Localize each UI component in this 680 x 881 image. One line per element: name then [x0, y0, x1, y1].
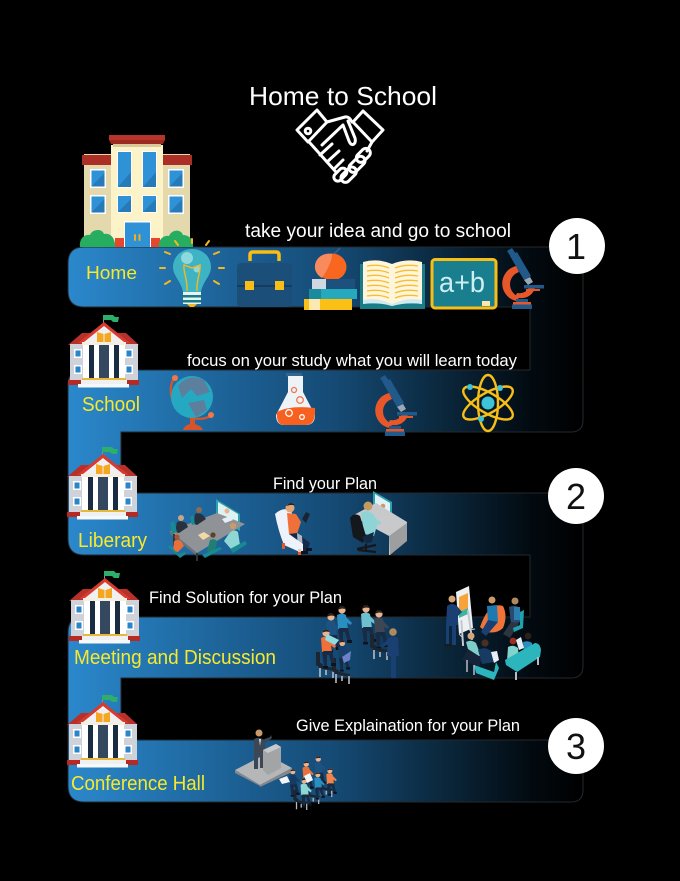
scene: presentation group: [445, 586, 541, 680]
scene: meeting table: [168, 499, 247, 561]
icon: flask: [276, 373, 315, 425]
building: Conference Hall: [67, 695, 138, 768]
icon: atom: [459, 375, 517, 431]
icon: open book: [360, 260, 425, 309]
step number 2: [548, 468, 604, 524]
label: Home: Home: [86, 262, 137, 283]
text: Find Solution caption: Find Solution for your Plan: [149, 589, 342, 607]
label: Meeting and Discussion: Meeting and Discussion: [74, 647, 276, 669]
scene: podium speaker: [235, 730, 292, 787]
building: School: [68, 315, 139, 388]
text: Give Explaination caption: Give Explaination for your Plan: [296, 717, 520, 735]
icon: globe: [171, 375, 214, 430]
step number 3: 3: [566, 726, 586, 767]
building: Liberary: [67, 447, 138, 520]
icon: briefcase: [237, 252, 292, 307]
scene: man at desk: [350, 491, 407, 555]
label: School: School: [82, 394, 140, 416]
step number 2: 2: [566, 476, 586, 517]
icon: home building: [80, 135, 193, 247]
label: Conference Hall: Conference Hall: [71, 773, 205, 795]
label: Liberary: Liberary: [78, 530, 147, 552]
icon: light bulb: [160, 239, 224, 307]
step number 1: 1: [566, 226, 586, 267]
icon: apple and books: [304, 248, 357, 310]
text: step 1 caption: take your idea and go to school: [245, 221, 511, 242]
icon: chalkboard: a+b: [439, 267, 485, 299]
icon: chalkboard: [432, 260, 496, 308]
title: Home to School: [249, 81, 437, 111]
building: Meeting and Discussion: [69, 571, 140, 644]
icon: microscope second: [375, 375, 417, 436]
panel: winding road band: [68, 247, 583, 802]
icon: microscope top: [502, 248, 544, 309]
text: Find your Plan caption: Find your Plan: [273, 475, 377, 493]
step number 1: [549, 218, 605, 274]
icon: handshake: [297, 110, 383, 184]
scene: man in armchair: [275, 503, 312, 555]
text: step 1 second caption: focus on your study what you will learn today: [187, 351, 517, 370]
scene: discussion circle: [318, 605, 399, 684]
step number 3: [548, 718, 604, 774]
scene: conference audience: [279, 756, 337, 810]
